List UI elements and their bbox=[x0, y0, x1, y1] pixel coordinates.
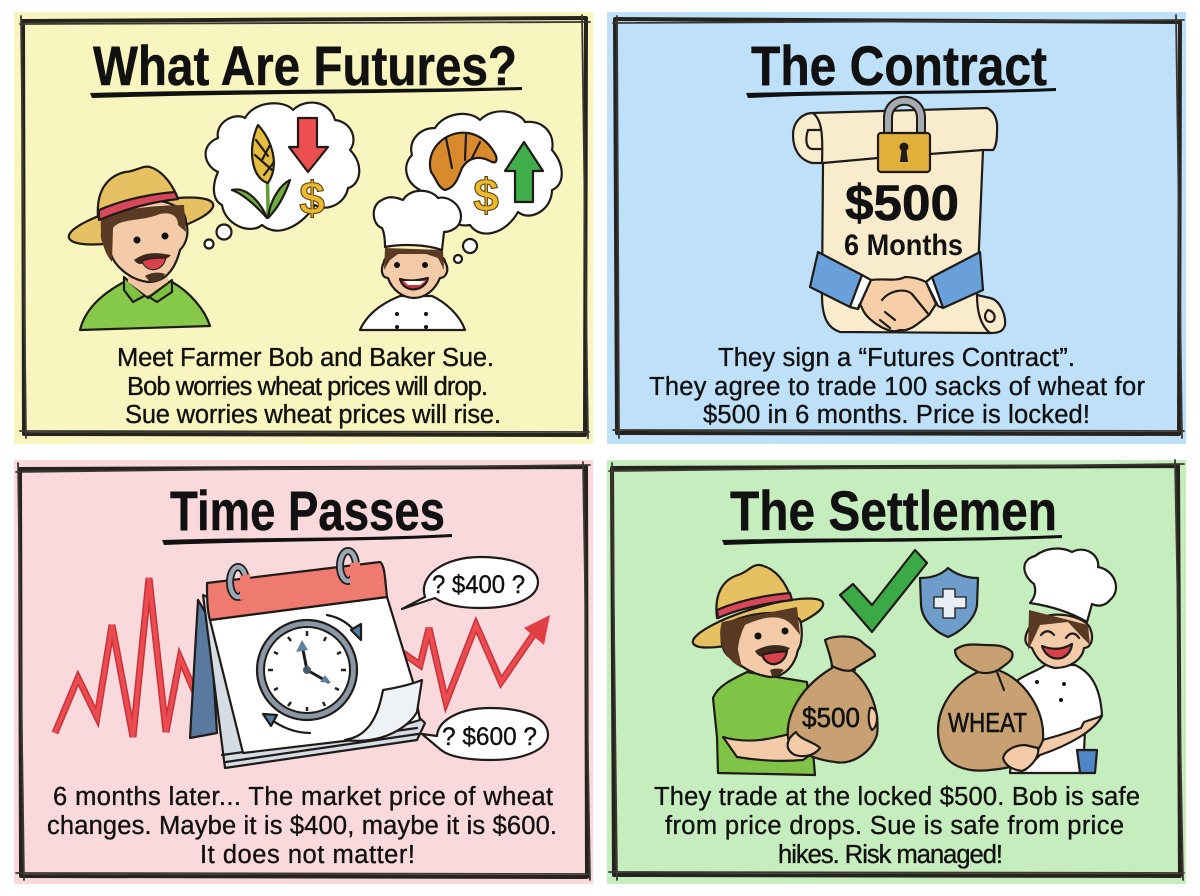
heading: What Are Futures? bbox=[93, 34, 517, 97]
icon: croissant bbox=[430, 133, 497, 190]
panel: what are futures bbox=[14, 12, 593, 444]
text block: hikes. Risk managed! bbox=[778, 841, 1003, 869]
face bbox=[722, 613, 802, 677]
text block: from price drops. Sue is safe from price bbox=[665, 812, 1124, 840]
text block: 6 months later... The market price of wheat bbox=[53, 783, 553, 811]
icon: shield bbox=[920, 568, 978, 637]
icon: green check mark bbox=[840, 550, 927, 632]
text block bbox=[649, 344, 1146, 429]
icon: baker thought bubble bbox=[406, 111, 562, 263]
icon: baker with sack bbox=[1003, 549, 1116, 773]
text block: Bob worries wheat prices will drop. bbox=[127, 373, 488, 401]
text block: Meet Farmer Bob and Baker Sue. bbox=[117, 344, 494, 372]
face bbox=[102, 200, 187, 282]
shirt bbox=[80, 282, 210, 330]
scroll curl bbox=[806, 130, 995, 322]
callout: $400 bbox=[402, 557, 538, 609]
dollar sign: $ bbox=[299, 172, 325, 224]
callout: $600 bbox=[422, 708, 548, 760]
text block bbox=[654, 783, 1140, 869]
red header bbox=[207, 562, 387, 620]
arm bbox=[723, 732, 820, 761]
text block: Sue worries wheat prices will rise. bbox=[125, 401, 501, 429]
text block: $500 in 6 months. Price is locked! bbox=[703, 401, 1090, 429]
text block bbox=[117, 344, 501, 429]
dollar sign: $ bbox=[473, 169, 499, 221]
neck bbox=[128, 270, 168, 296]
text block: changes. Maybe it is $400, maybe it is $600. bbox=[47, 812, 557, 840]
face bbox=[1025, 615, 1092, 668]
contract price: $500 bbox=[845, 175, 959, 231]
icon: baker sue bbox=[360, 191, 465, 330]
thought dot small bbox=[454, 255, 462, 263]
shirt bbox=[713, 672, 815, 775]
binder rings bbox=[230, 567, 246, 597]
chef hat bbox=[1024, 549, 1116, 622]
icon: calendar and clock bbox=[190, 551, 425, 768]
arm bbox=[1003, 716, 1102, 770]
sack label: WHEAT bbox=[948, 707, 1027, 738]
thought dot large bbox=[216, 224, 232, 240]
chart: red zigzag line bbox=[55, 578, 550, 737]
hat crown bbox=[98, 167, 177, 217]
sack label: $500 bbox=[802, 702, 860, 733]
page curl bbox=[345, 680, 422, 741]
main page bbox=[210, 597, 420, 753]
thought dot small bbox=[204, 240, 214, 248]
apron bbox=[1077, 750, 1097, 773]
icon: farmer with sack bbox=[689, 565, 827, 775]
heading: Time Passes bbox=[170, 479, 445, 542]
icon: wheat bbox=[232, 125, 290, 218]
back cover bbox=[190, 600, 217, 738]
rotation arrows bbox=[268, 615, 358, 733]
text block bbox=[47, 783, 557, 869]
panel: the contract bbox=[607, 12, 1186, 444]
icon: farmer thought bubble bbox=[204, 103, 359, 248]
hand bbox=[1003, 745, 1038, 771]
page stack bbox=[203, 595, 425, 768]
clock bbox=[257, 620, 357, 720]
icon: red down arrow bbox=[289, 118, 328, 172]
text block: It does not matter! bbox=[200, 841, 415, 869]
hat crown bbox=[716, 565, 792, 618]
panel: time passes bbox=[14, 460, 593, 884]
thought dot large bbox=[463, 239, 477, 253]
text block: They sign a “Futures Contract”. bbox=[718, 344, 1075, 372]
callout: $400: ? $400 ? bbox=[432, 571, 525, 599]
text block: They trade at the locked $500. Bob is safe bbox=[654, 783, 1140, 811]
heading: The Contract bbox=[751, 34, 1047, 97]
heading: The Settlemen bbox=[730, 479, 1057, 542]
icon: scroll bbox=[793, 101, 1005, 333]
hat brim bbox=[65, 188, 217, 254]
hand bbox=[788, 708, 877, 756]
icon: padlock bbox=[878, 101, 930, 172]
icon: farmer bob bbox=[65, 167, 217, 330]
jacket bbox=[1010, 665, 1102, 773]
icon: handshake bbox=[810, 252, 983, 331]
icon: wheat sack bbox=[938, 644, 1043, 771]
text block: They agree to trade 100 sacks of wheat for bbox=[649, 373, 1146, 401]
icon: money sack bbox=[788, 636, 878, 763]
hat brim bbox=[689, 589, 827, 657]
contract duration: 6 Months bbox=[844, 229, 963, 262]
panel: the settlement bbox=[607, 460, 1186, 884]
icon: green up arrow bbox=[505, 142, 543, 202]
callout: $600: ? $600 ? bbox=[442, 723, 537, 751]
